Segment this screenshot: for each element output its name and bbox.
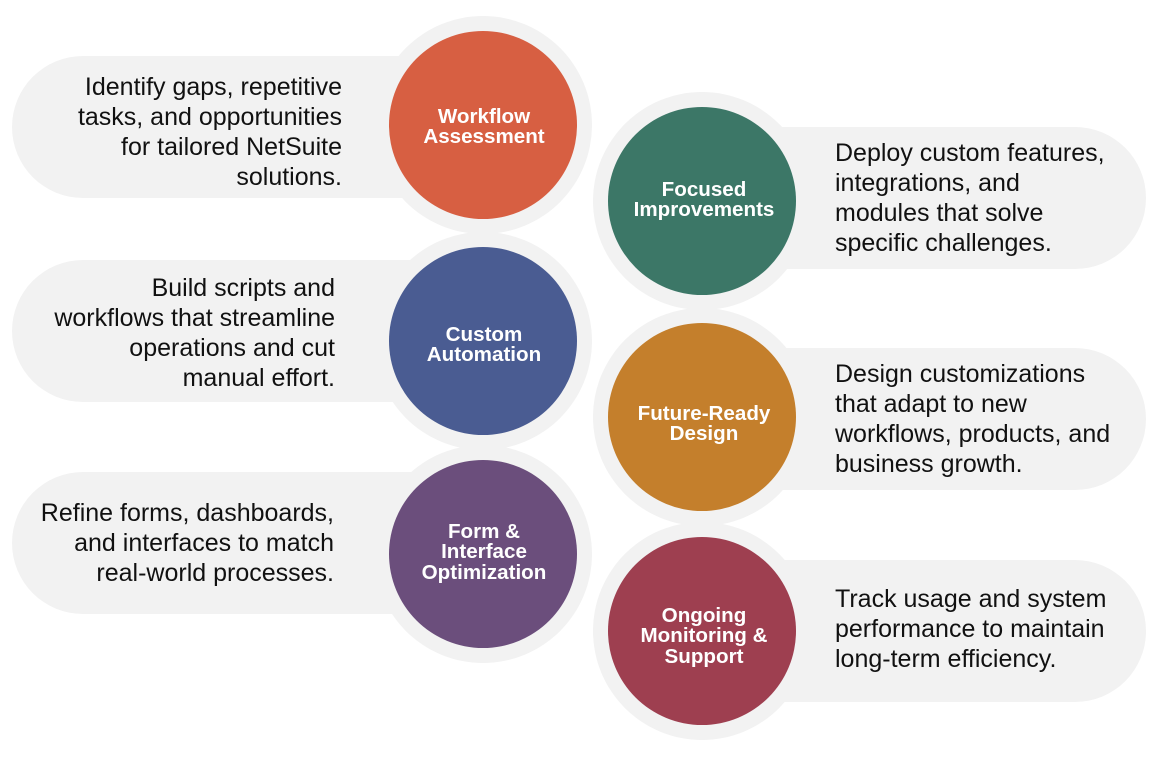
text: ongoing monitoring description: long-term efficiency. xyxy=(835,645,1056,673)
circle: form and interface optimization: Optimization xyxy=(422,561,546,584)
circle: custom automation xyxy=(389,247,577,435)
text: workflow assessment description: for tailored NetSuite xyxy=(121,133,342,161)
text: form and interface description: Refine forms, dashboards, xyxy=(41,499,334,527)
circle: focused improvements: Improvements xyxy=(634,198,774,221)
circle: form and interface optimization: Form & xyxy=(448,520,520,543)
text: workflow assessment description: tasks, and opportunities xyxy=(78,103,342,131)
text: custom automation description: workflows that streamline xyxy=(53,304,335,332)
text: workflow assessment description: solutions. xyxy=(236,163,342,191)
circle: ongoing monitoring and support: Ongoing xyxy=(662,604,746,627)
text: custom automation description xyxy=(53,274,335,392)
circle: future-ready design xyxy=(608,323,796,511)
circle: form and interface optimization: Interface xyxy=(441,540,527,563)
circle: ongoing monitoring and support xyxy=(608,537,796,725)
panel: custom automation xyxy=(12,232,592,450)
circle: ongoing monitoring and support: Monitoring & xyxy=(641,624,768,647)
text: ongoing monitoring description xyxy=(835,585,1106,673)
text: focused improvements description xyxy=(835,139,1105,257)
text: ongoing monitoring description: Track usage and system xyxy=(835,585,1106,613)
circle: workflow assessment xyxy=(389,31,577,219)
text: form and interface description: and interfaces to match xyxy=(74,529,334,557)
text: custom automation description: manual effort. xyxy=(183,364,335,392)
circle: custom automation: Custom xyxy=(446,323,522,346)
text: custom automation description: operations and cut xyxy=(129,334,335,362)
circle: focused improvements xyxy=(608,107,796,295)
text: focused improvements description: specific challenges. xyxy=(835,229,1052,257)
text: focused improvements description: Deploy custom features, xyxy=(835,139,1105,167)
panel: ongoing monitoring and support xyxy=(593,522,1146,740)
text: ongoing monitoring description: performance to maintain xyxy=(835,615,1105,643)
text: custom automation description: Build scripts and xyxy=(152,274,335,302)
circle: future-ready design: Future-Ready xyxy=(638,402,771,425)
text: future-ready design description: Design customizations xyxy=(835,360,1085,388)
text: future-ready design description: that adapt to new xyxy=(835,390,1028,418)
panel: workflow assessment xyxy=(12,16,592,234)
text: focused improvements description: modules that solve xyxy=(835,199,1043,227)
text: future-ready design description: workflows, products, and xyxy=(834,420,1110,448)
text: focused improvements description: integrations, and xyxy=(835,169,1020,197)
circle: ongoing monitoring and support: Support xyxy=(665,645,744,668)
circle: custom automation: Automation xyxy=(427,343,541,366)
circle: form and interface optimization xyxy=(389,460,577,648)
circle: workflow assessment: Workflow xyxy=(438,105,531,128)
text: future-ready design description: business growth. xyxy=(835,450,1023,478)
text: future-ready design description xyxy=(834,360,1110,478)
text: form and interface description: real-world processes. xyxy=(96,559,334,587)
circle: future-ready design: Design xyxy=(670,422,738,445)
panel: form and interface optimization xyxy=(12,445,592,663)
circle: focused improvements: Focused xyxy=(662,178,746,201)
panel: focused improvements xyxy=(593,92,1146,310)
panel: future-ready design xyxy=(593,308,1146,526)
circle: workflow assessment: Assessment xyxy=(423,125,545,148)
text: form and interface description xyxy=(41,499,334,587)
text: workflow assessment description: Identify gaps, repetitive xyxy=(85,73,342,101)
text: workflow assessment description xyxy=(78,73,342,191)
